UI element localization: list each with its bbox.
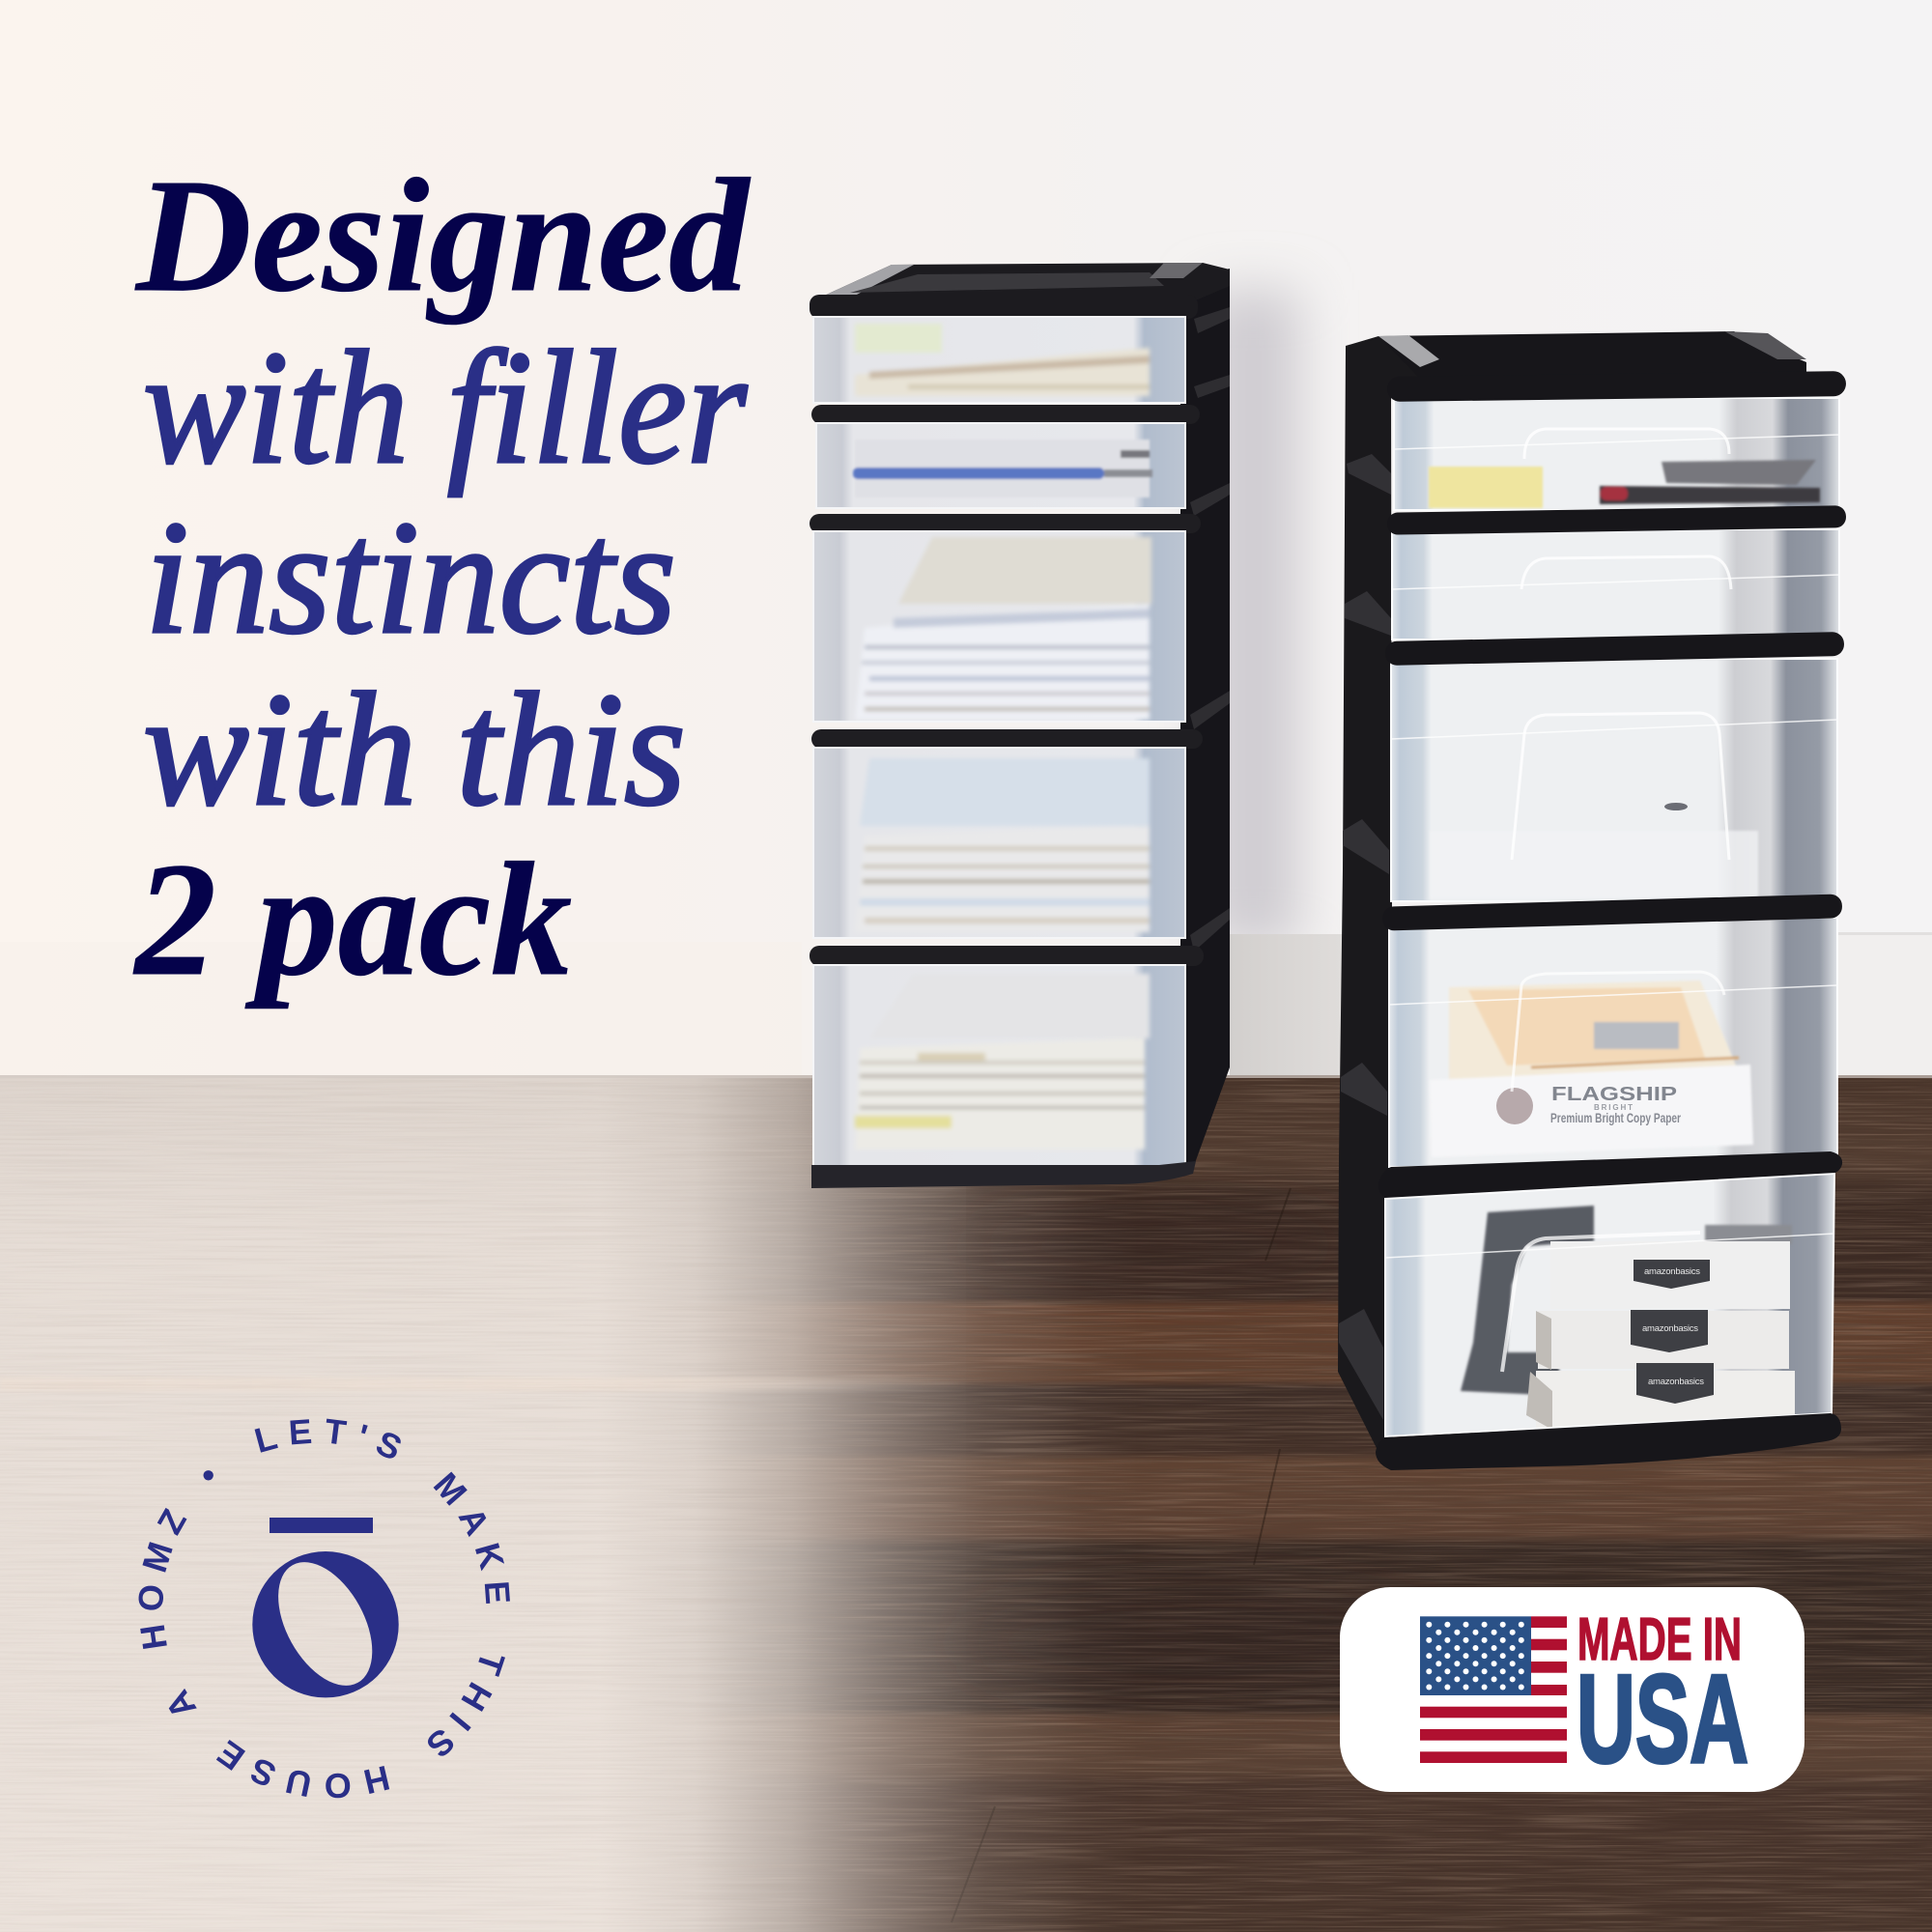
- headline line: Designed: Designed: [134, 146, 752, 326]
- right drawer 1: [1394, 398, 1839, 510]
- made in USA badge: [1340, 1587, 1804, 1792]
- amazon boxes: amazonbasics: [1648, 1377, 1704, 1387]
- headline line: 2 pack: 2 pack: [132, 830, 572, 1009]
- paper box label: FLAGSHIP: [1551, 1084, 1677, 1105]
- right rail 2: [1387, 505, 1846, 535]
- amazon boxes: [1526, 1241, 1795, 1430]
- right rail 5: [1378, 1151, 1842, 1200]
- right drawer 4: [1389, 918, 1837, 1167]
- right rail 3: [1385, 632, 1844, 666]
- right drawer 2: [1392, 529, 1839, 639]
- left rail 4: [811, 729, 1203, 749]
- product: right five-drawer tower: [1338, 331, 1846, 1470]
- left drawer 2: [816, 423, 1185, 508]
- left drawer 1: [813, 317, 1185, 403]
- brand seal: [139, 1418, 510, 1799]
- headline line: with filler: with filler: [143, 318, 748, 497]
- left rail 3: [810, 514, 1201, 533]
- left tower base: [811, 1161, 1196, 1188]
- badge text: MADE IN: MADE IN: [1577, 1606, 1742, 1673]
- flag: [1420, 1616, 1567, 1763]
- right drawer 3: [1391, 659, 1837, 901]
- product: left five-drawer tower: [810, 263, 1230, 1188]
- right rail 1: [1387, 371, 1846, 402]
- background: wall: [0, 0, 1932, 1082]
- left rail 1: [810, 295, 1198, 319]
- seal ring text: LET'S MAKE THIS HOUSE A HOMZ: [139, 1418, 510, 1799]
- badge text: USA: USA: [1577, 1648, 1748, 1789]
- amazon boxes: amazonbasics: [1642, 1323, 1698, 1334]
- left drawer 4: [813, 748, 1185, 938]
- right rail 4: [1382, 894, 1842, 931]
- paper box label: [1496, 1084, 1682, 1125]
- right tower side frame: [1338, 336, 1430, 1454]
- left drawer 5: [813, 965, 1185, 1166]
- left drawer 3: [813, 531, 1185, 722]
- background: wood floor fading to pale on the left: [0, 1075, 1932, 1932]
- headline line: with this: with this: [143, 660, 686, 839]
- headline: [132, 146, 752, 1009]
- left tower top: [811, 263, 1230, 305]
- left rail 5: [810, 946, 1204, 966]
- amazon boxes: amazonbasics: [1644, 1266, 1700, 1277]
- right drawer 5: [1385, 1174, 1834, 1436]
- left tower side frame: [1180, 269, 1230, 1174]
- right tower top tray: [1378, 331, 1806, 379]
- paper box label: BRIGHT: [1594, 1103, 1633, 1112]
- headline line: instincts: instincts: [145, 488, 676, 668]
- right tower base: [1376, 1413, 1841, 1470]
- left rail 2: [811, 405, 1200, 424]
- paper box label: Premium Bright Copy Paper: [1550, 1111, 1682, 1125]
- seal dot: [203, 1470, 213, 1481]
- seal logo: o with macron: [252, 1518, 399, 1697]
